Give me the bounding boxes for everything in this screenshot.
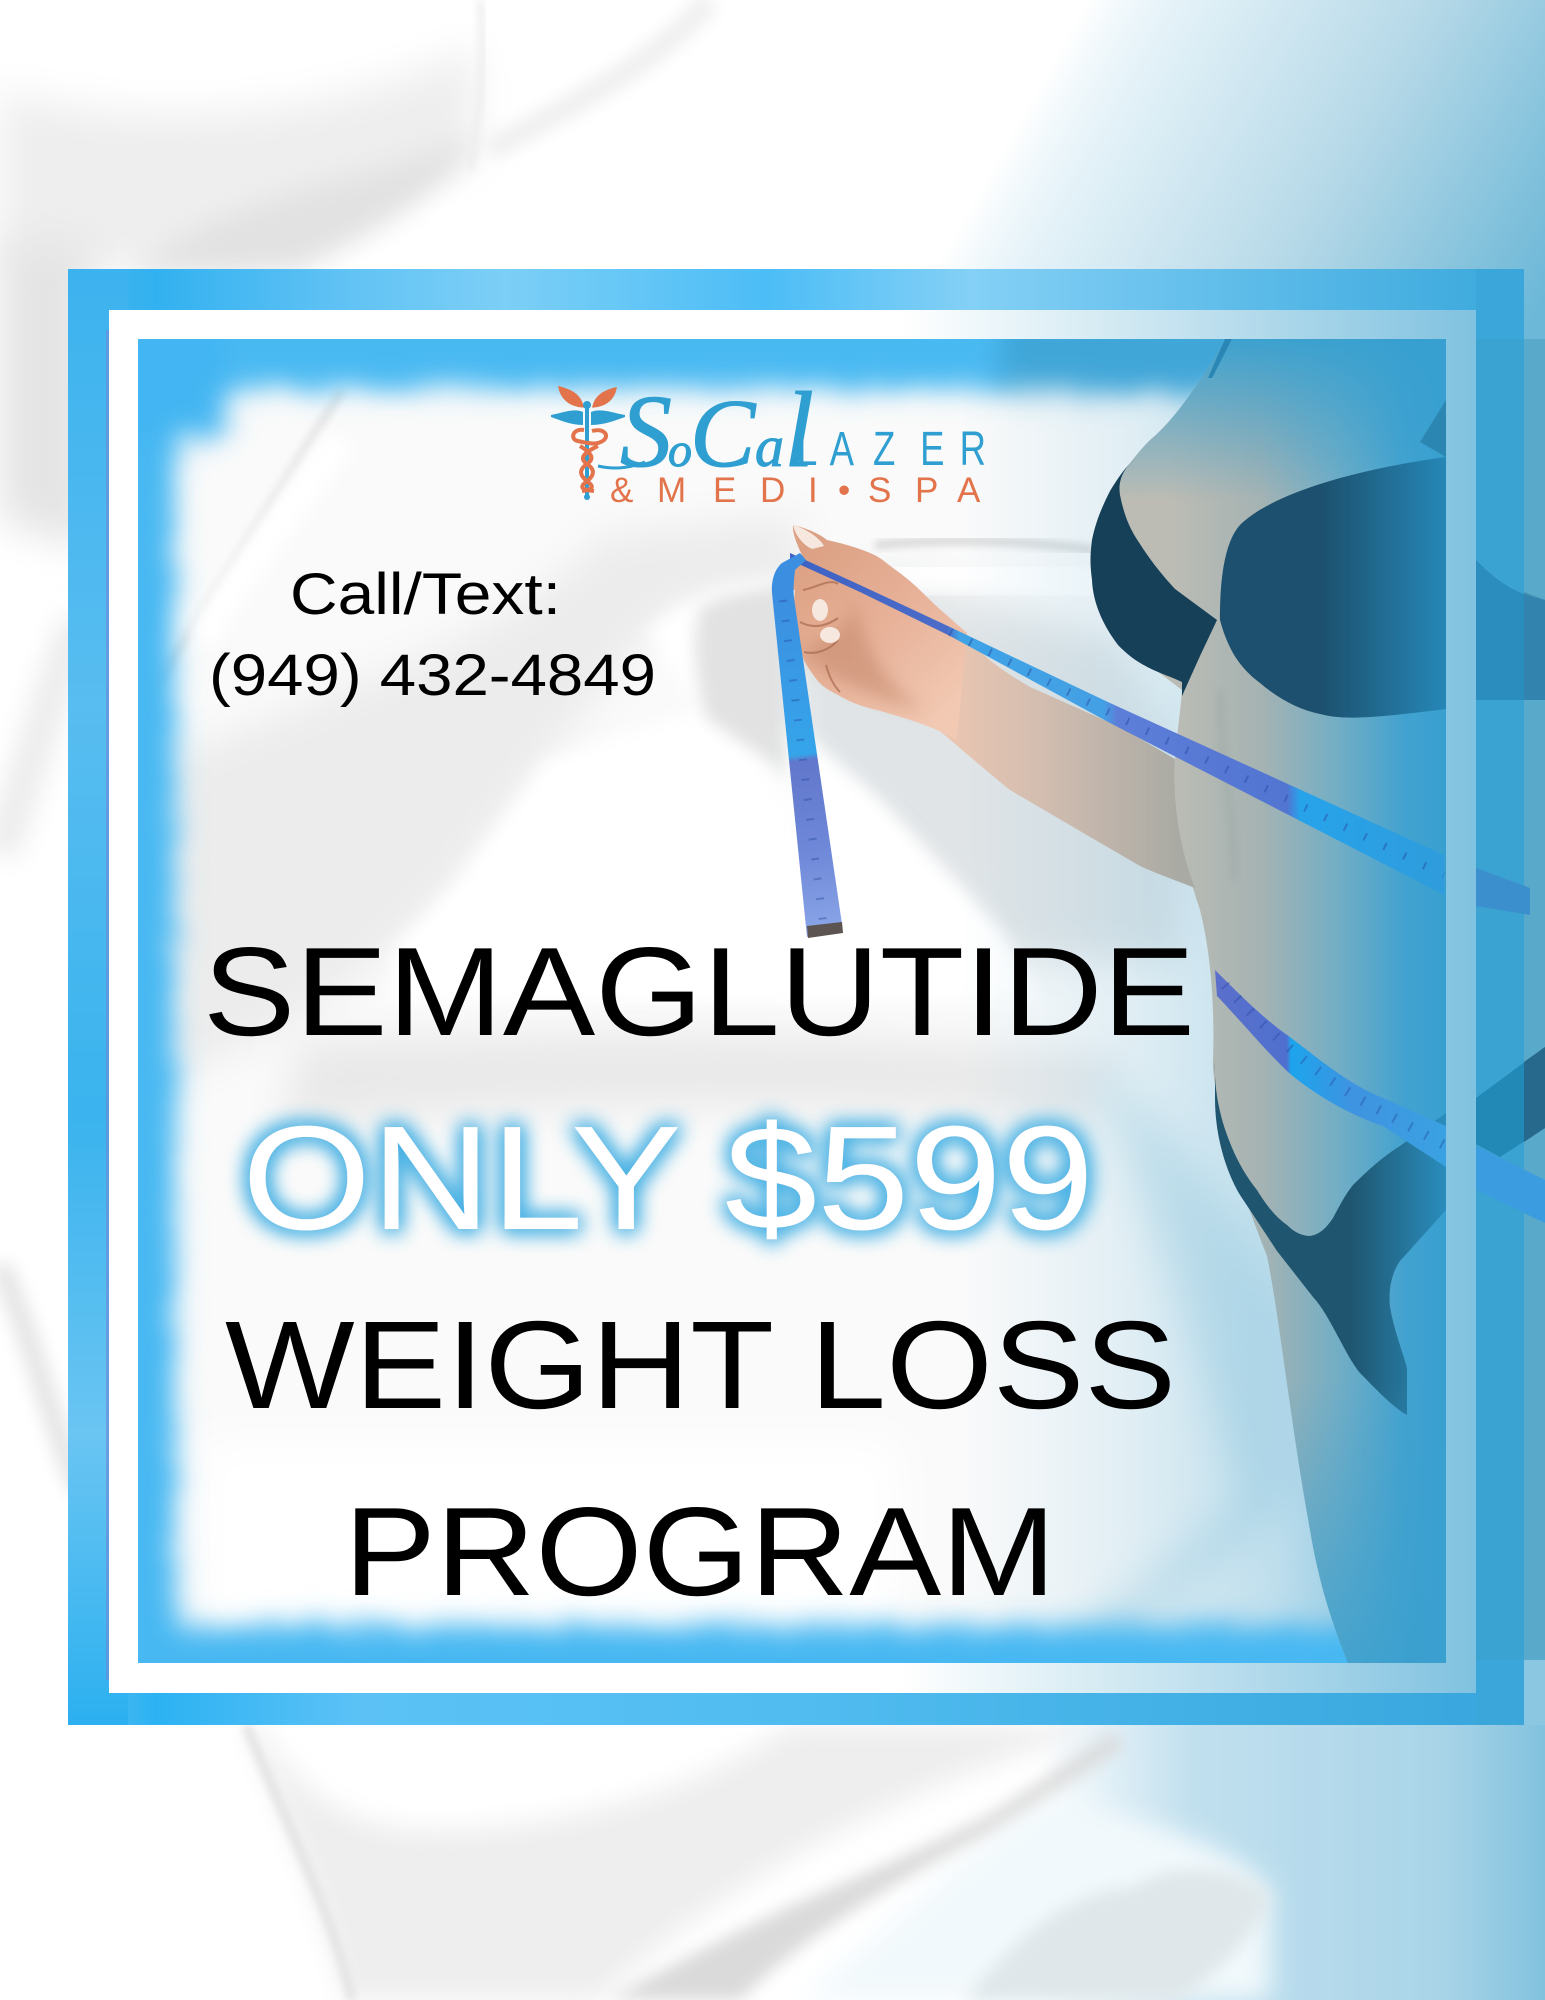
tape measure hanging end [772, 553, 843, 938]
headline: PROGRAM [344, 1481, 1056, 1622]
bra strap [1420, 400, 1446, 457]
arm [935, 630, 1195, 888]
headline [203, 921, 1195, 1622]
phone contact: (949) 432-4849 [209, 643, 656, 708]
headline: WEIGHT LOSS [225, 1296, 1176, 1435]
bikini [1215, 1062, 1446, 1415]
logo wordmark SoCal: S [620, 374, 672, 489]
logo wordmark medi spa: & MEDI•SPA [610, 471, 981, 510]
logo wordmark SoCal: C [690, 380, 757, 488]
tape measure across hips [1215, 970, 1446, 1167]
logo wordmark SoCal: a [755, 414, 784, 479]
panel satin background [170, 390, 1309, 1628]
logo [551, 371, 986, 510]
white inner frame [109, 310, 1476, 1693]
logo wordmark LAZER: LAZER [797, 422, 986, 476]
woman's torso [777, 339, 1450, 1663]
hand [780, 525, 967, 740]
phone contact: Call/Text: [290, 562, 561, 627]
headline: SEMAGLUTIDE [203, 921, 1195, 1062]
panel blue vignette [138, 339, 1348, 1663]
tape measure across chest [790, 553, 1444, 895]
bra cups [1220, 457, 1446, 718]
photo continuation right of frame [1476, 560, 1545, 1223]
logo wordmark SoCal: o [668, 424, 692, 477]
fingernails [793, 525, 840, 643]
photo panel [116, 317, 1468, 1685]
logo swash [598, 462, 645, 468]
phone contact [209, 562, 656, 708]
price: ONLY $599 [242, 1096, 1094, 1261]
icon: caduceus [551, 388, 625, 500]
logo wordmark SoCal: l [784, 371, 814, 490]
outer blue frame [68, 269, 1545, 1725]
